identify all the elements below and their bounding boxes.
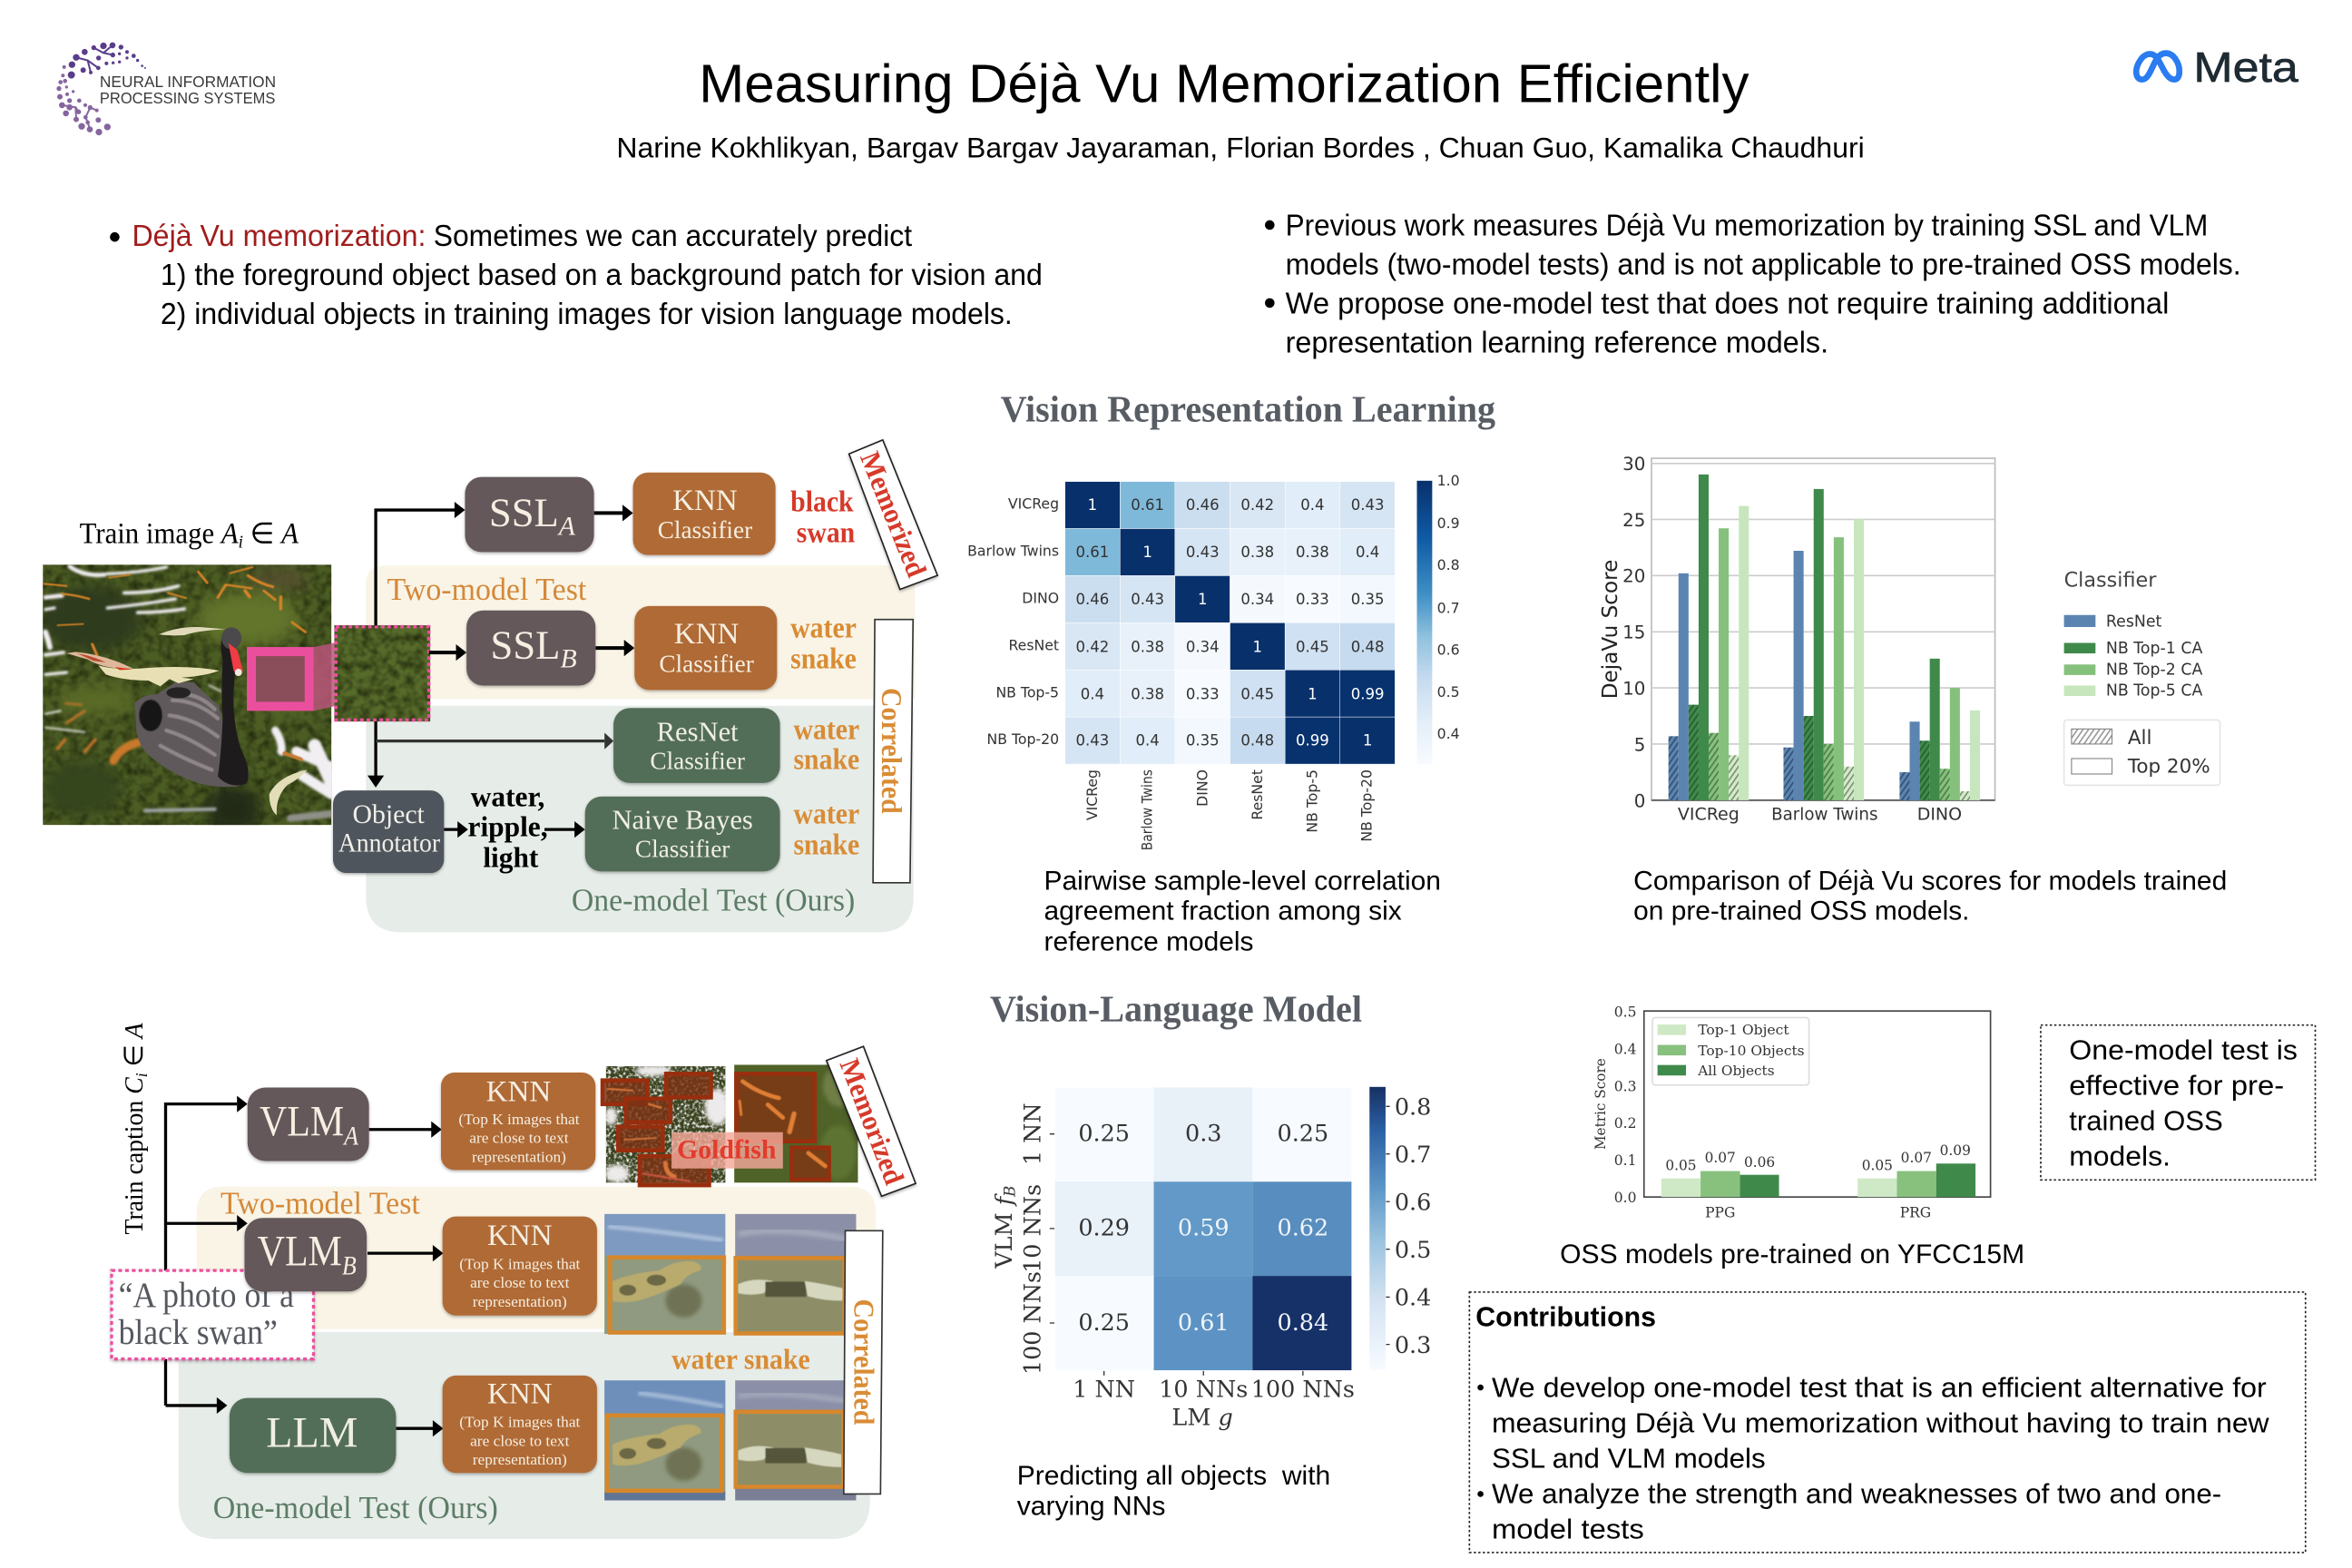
caption: bar chart comparison: Comparison of Déjà Vu scores for models trained (1633, 866, 2227, 896)
prediction: water snake (ResNet): snake (793, 743, 859, 776)
box: Object Annotator (333, 790, 444, 873)
legend: hatch (2064, 720, 2220, 785)
bullet list: SSL and VLM models (1492, 1443, 1766, 1474)
y axis title: B (1001, 1186, 1018, 1198)
image: snake C1 (604, 1380, 725, 1501)
heatmap: pairwise correlation among six reference models (967, 472, 1460, 850)
bar chart: OSS models pre-trained on YFCC15M (1592, 1004, 1991, 1220)
box: KNN classifier A: KNN (672, 485, 738, 517)
box: KNN classifier B (634, 606, 777, 690)
callout: caption example (112, 1270, 313, 1359)
label: train caption: ∈ (120, 1038, 149, 1073)
heatmap values: 0.4 (1300, 496, 1325, 514)
arrows (165, 1096, 443, 1436)
panel: vision memorization diagram (39, 440, 937, 933)
y tick labels: 0.1 (1614, 1152, 1636, 1169)
heatmap values: 0.61 (1178, 1309, 1230, 1337)
bars: VICReg (1669, 475, 1749, 800)
image: goldfish 2 (734, 1064, 859, 1182)
heatmap values: 0.25 (1278, 1120, 1328, 1147)
y tick labels: 0.2 (1614, 1115, 1636, 1132)
x tick labels: 100 NNs (1251, 1376, 1355, 1403)
heatmap values: 0.3 (1185, 1120, 1221, 1147)
heatmap cells (1055, 1087, 1351, 1370)
box: KNN A: (Top K images that (458, 1111, 580, 1128)
images: snake retrieval (604, 1214, 856, 1501)
bar values: 0.07 (1901, 1150, 1932, 1166)
y tick labels: 20 (1622, 565, 1645, 586)
box: KNN B: representation) (473, 1293, 567, 1310)
y tick labels: 5 (1634, 734, 1645, 755)
bars: Barlow Twins (1783, 489, 1864, 800)
label: Correlated (873, 620, 913, 883)
axes and gridlines (1651, 458, 1995, 800)
heatmap row labels: VICReg (1008, 495, 1059, 512)
bar chart: Déjà Vu scores by classifier (1599, 454, 2220, 824)
logo: Neural Information Processing Systems (57, 43, 276, 135)
panel: vision-language diagram (112, 1023, 916, 1539)
y tick labels (1622, 454, 1645, 811)
label: train image: Train image A (80, 516, 240, 549)
legend: classifier (2064, 568, 2202, 701)
box: Naive Bayes classifier (585, 797, 780, 871)
box: KNN B: (Top K images that (459, 1255, 581, 1272)
heatmap values: 0.38 (1296, 544, 1329, 561)
heatmap values: 0.43 (1186, 544, 1220, 561)
heatmap values: 0.99 (1351, 685, 1384, 702)
prediction: water snake (SSL B) (790, 612, 857, 675)
heatmap values: 0.84 (1278, 1309, 1328, 1337)
colorbar: 0.4 (1395, 1285, 1431, 1312)
heatmap colorbar: 0.8 (1437, 556, 1460, 573)
box: KNN A (441, 1073, 595, 1170)
heatmap row labels (967, 495, 1059, 748)
heatmap values: 0.38 (1240, 544, 1274, 561)
box: KNN C (443, 1376, 597, 1473)
heatmap values: 1 (1253, 638, 1262, 655)
heatmap values: 0.99 (1296, 732, 1329, 750)
prediction: water snake (Naive Bayes): snake (793, 828, 859, 860)
y tick labels: 10 (1622, 678, 1645, 699)
label: Memorized: Memorized (854, 447, 933, 582)
heatmap values: 0.29 (1078, 1215, 1130, 1242)
heatmap values (1078, 1120, 1328, 1337)
colorbar (1369, 1087, 1431, 1370)
box: KNN C: are close to text (470, 1433, 570, 1450)
caption: correlation heatmap: reference models (1044, 926, 1253, 956)
y tick labels: 30 (1622, 454, 1645, 475)
box: KNN B (443, 1217, 597, 1316)
heatmap values: 0.42 (1240, 496, 1274, 514)
text block: previous work and proposal (1265, 210, 2241, 359)
x tick labels (1705, 1204, 1931, 1220)
text: annotated objects: water, (471, 781, 544, 813)
caption: predicting all objects (1017, 1461, 1330, 1522)
y axis title: Metric Score (1592, 1058, 1609, 1150)
label: train caption: i (132, 1073, 151, 1077)
colorbar: 0.3 (1395, 1332, 1431, 1359)
y tick labels: 10 NNs (1020, 1184, 1047, 1273)
cropped background patch (334, 625, 430, 721)
text block: previous work and proposal: Previous work measures Déjà Vu memorization by training SSL and VLM (1286, 210, 2208, 243)
legend: classifier: Classifier (2064, 568, 2157, 592)
box: KNN C: representation) (473, 1451, 567, 1468)
heatmap values: 0.43 (1076, 732, 1109, 750)
colorbar: 0.7 (1395, 1142, 1431, 1169)
heatmap values: 0.4 (1356, 544, 1379, 561)
text block: previous work and proposal: models (two-model tests) and is not applicable to pre-trained OSS models. (1286, 249, 2241, 282)
heatmap row labels: NB Top-20 (986, 730, 1059, 748)
legend: hatch: Top 20% (2127, 755, 2210, 778)
callout: one-model test is effective: trained OSS (2069, 1105, 2223, 1136)
bullet list (1477, 1373, 2270, 1545)
heatmap values: 0.59 (1178, 1215, 1230, 1242)
heatmap values: 0.25 (1078, 1309, 1130, 1337)
title: Measuring Déjà Vu Memorization Efficiently (699, 53, 1749, 113)
heatmap colorbar: 1.0 (1437, 472, 1460, 489)
caption: correlation heatmap: Pairwise sample-level correlation (1044, 866, 1441, 896)
heatmap column labels: ResNet (1249, 769, 1266, 820)
label: Memorized: Memorized (834, 1054, 911, 1190)
image: snake B2 (735, 1214, 856, 1335)
text block: definition of Déjà Vu memorization: 2) individual objects in training images for vision language models. (161, 298, 1013, 331)
box: VLM B: VLM (258, 1227, 354, 1275)
y tick labels: 15 (1622, 622, 1645, 642)
box: ResNet classifier (613, 708, 780, 783)
prediction: water snake (ResNet) (793, 712, 859, 776)
box: VLM A: VLM (260, 1097, 356, 1145)
caption: predicting all objects: varying NNs (1017, 1492, 1165, 1522)
box: KNN A: are close to text (469, 1130, 569, 1147)
heatmap: predicting all objects with varying NNs (991, 1087, 1431, 1431)
caption: correlation heatmap: agreement fraction among six (1044, 897, 1402, 926)
one-model test background (179, 1332, 870, 1539)
box: KNN classifier B: Classifier (659, 651, 754, 678)
bar values: 0.07 (1705, 1150, 1736, 1166)
label: train image: ∈ (243, 516, 281, 549)
x tick labels: PPG (1705, 1204, 1735, 1220)
prediction: water snake (ResNet): water (793, 712, 859, 745)
box: SSL A (465, 477, 594, 552)
text block: definition of Déjà Vu memorization: Sometimes we can accurately predict (434, 220, 912, 253)
text block: previous work and proposal: We propose one-model test that does not require training additional (1286, 287, 2169, 320)
two-model test background (197, 1187, 876, 1329)
prediction: black swan: black (790, 486, 854, 519)
y tick labels: 1 NN (1020, 1102, 1047, 1165)
legend: Top-1 Object (1698, 1022, 1789, 1038)
tick marks (1050, 1106, 1390, 1376)
photo: black swan (39, 564, 333, 833)
legend: hatch: All (2128, 727, 2151, 750)
image: snake C2 (735, 1380, 856, 1501)
prediction: black swan (790, 486, 855, 550)
heatmap values: 1 (1088, 496, 1097, 514)
two-model test background (366, 565, 915, 699)
logo: Meta (2136, 44, 2298, 91)
label: Correlated: Correlated (848, 1299, 880, 1426)
y tick labels: 0.5 (1614, 1004, 1636, 1020)
bullet list: measuring Déjà Vu memorization without having to train new (1492, 1408, 2270, 1439)
prediction: water snake (Naive Bayes) (793, 798, 859, 860)
arrows (368, 502, 634, 838)
y tick labels (1020, 1102, 1047, 1375)
label: train image: i (239, 532, 243, 552)
label: One-model Test: One-model Test (Ours) (572, 882, 855, 917)
logo: Neural Information Processing Systems: PROCESSING SYSTEMS (100, 89, 275, 107)
caption: OSS models: OSS models pre-trained on YFCC15M (1560, 1240, 2024, 1269)
swan neck and head (218, 638, 249, 786)
label: Two-model Test: Two-model Test (387, 572, 587, 607)
heatmap values: 0.46 (1076, 591, 1109, 608)
label: One-model Test: One-model Test (Ours) (213, 1490, 498, 1525)
heatmap column labels: NB Top-20 (1358, 769, 1376, 842)
prediction: water snake (SSL B): water (790, 612, 857, 644)
y axis title: DejaVu Score (1599, 560, 1622, 699)
callout: one-model test is effective: effective for pre- (2069, 1071, 2284, 1102)
text block: definition of Déjà Vu memorization: 1) the foreground object based on a background patch for vision and (161, 259, 1043, 292)
bullet list: model tests (1492, 1514, 1644, 1545)
box: SSL B: B (560, 644, 577, 674)
y tick labels: 25 (1622, 510, 1645, 531)
heatmap values: 0.46 (1186, 496, 1220, 514)
x tick labels: DINO (1917, 804, 1962, 824)
heatmap values: 0.61 (1076, 544, 1109, 561)
image: snake B1 (604, 1214, 725, 1334)
legend (1652, 1017, 1809, 1085)
heatmap values: 0.43 (1131, 591, 1164, 608)
prediction: water snake (Naive Bayes): water (793, 798, 859, 830)
colorbar: 0.8 (1395, 1094, 1431, 1122)
y tick labels: 0.0 (1614, 1190, 1636, 1206)
callout: caption example: black swan” (119, 1313, 278, 1352)
heatmap values: 0.62 (1278, 1215, 1328, 1242)
swan body (134, 682, 249, 787)
heatmap colorbar: 0.6 (1437, 642, 1460, 659)
x tick labels: 10 NNs (1159, 1376, 1248, 1403)
heading: Vision Representation Learning: Vision Representation Learning (1001, 388, 1495, 430)
heatmap colorbar (1416, 472, 1460, 764)
colorbar: 0.6 (1395, 1190, 1431, 1217)
bars: PRG (1857, 1163, 1975, 1197)
bars: PPG (1661, 1171, 1779, 1197)
heatmap colorbar: 0.7 (1437, 599, 1460, 616)
heatmap row labels: Barlow Twins (967, 542, 1059, 559)
heatmap values: 0.35 (1351, 591, 1384, 608)
y tick labels (1614, 1004, 1637, 1206)
heatmap values: 0.48 (1240, 732, 1274, 750)
images: goldfish retrieval (603, 1064, 859, 1185)
heatmap values: 0.43 (1351, 496, 1384, 514)
koi (44, 567, 306, 760)
x tick labels: PRG (1900, 1204, 1931, 1220)
bullet list: We develop one-model test that is an efficient alternative for (1492, 1373, 2267, 1404)
y tick labels: 100 NNs (1020, 1271, 1047, 1375)
white koi (98, 665, 220, 686)
colorbar: 0.5 (1395, 1237, 1431, 1264)
y tick labels: 0.3 (1614, 1078, 1636, 1094)
logo: Meta: Meta (2193, 44, 2298, 91)
heatmap colorbar: 0.5 (1437, 683, 1460, 701)
heatmap row labels: DINO (1022, 590, 1059, 607)
heatmap cells (1065, 482, 1395, 764)
text block: definition of Déjà Vu memorization (110, 220, 1043, 331)
label: train caption: Train caption C (120, 1077, 149, 1234)
callout: one-model test is effective: models. (2069, 1141, 2171, 1171)
y tick labels: 0 (1634, 790, 1645, 811)
box: KNN A: representation) (472, 1149, 566, 1166)
heatmap column labels: NB Top-5 (1303, 769, 1320, 833)
legend: Top-10 Objects (1698, 1043, 1805, 1059)
box: SSL B: SSL (491, 622, 560, 668)
prediction: black swan: swan (797, 517, 855, 550)
heatmap values: 0.35 (1186, 732, 1220, 750)
heatmap values: 0.33 (1296, 591, 1329, 608)
heatmap values: 1 (1198, 591, 1208, 608)
bullet list: We analyze the strength and weaknesses of two and one- (1492, 1478, 2221, 1509)
callout: one-model test is effective (2041, 1025, 2316, 1180)
box: ResNet classifier: ResNet (657, 717, 739, 748)
legend: classifier: ResNet (2106, 612, 2162, 631)
callout: one-model test is effective: One-model test is (2069, 1035, 2298, 1066)
caption: correlation heatmap (1044, 866, 1441, 956)
caption: bar chart comparison: on pre-trained OSS models. (1633, 897, 1969, 926)
bar values: 0.06 (1744, 1154, 1775, 1171)
heatmap values: 0.48 (1351, 638, 1384, 655)
box: KNN A: KNN (486, 1075, 551, 1108)
x tick labels: 1 NN (1073, 1376, 1135, 1403)
heatmap values: 0.33 (1186, 685, 1220, 702)
heatmap values: 0.34 (1240, 591, 1274, 608)
heatmap values: 0.34 (1186, 638, 1220, 655)
label: Correlated (844, 1230, 883, 1494)
authors: Narine Kokhlikyan, Bargav Bargav Jayaraman, Florian Bordes , Chuan Guo, Kamalika Chaudhuri (616, 132, 1865, 164)
text block: contributions (1469, 1292, 2306, 1553)
heatmap row labels: NB Top-5 (995, 684, 1059, 701)
callout: caption example: “A photo of a (119, 1276, 294, 1315)
heading: Vision-Language Model: Vision-Language Model (990, 988, 1362, 1030)
x tick labels (1073, 1376, 1355, 1403)
box: Object Annotator: Object (352, 799, 426, 829)
one-model test background (366, 706, 914, 933)
legend: classifier: NB Top-1 CA (2106, 640, 2202, 658)
text block: previous work and proposal: representation learning reference models. (1286, 326, 1828, 359)
text: annotated objects: ripple, (468, 810, 548, 842)
axes (1644, 1011, 1991, 1197)
box: Object Annotator: Annotator (338, 828, 440, 858)
label: Goldfish: Goldfish (677, 1135, 777, 1165)
box: KNN B: KNN (487, 1220, 553, 1252)
label: water snake: water snake (671, 1343, 810, 1375)
box: KNN C: KNN (487, 1378, 553, 1411)
heading: contributions: Contributions (1475, 1301, 1656, 1332)
box: KNN C: (Top K images that (459, 1414, 581, 1431)
box: ResNet classifier: Classifier (650, 748, 745, 775)
box: KNN classifier A: Classifier (658, 516, 752, 544)
label: Two-model Test: Two-model Test (220, 1185, 420, 1220)
heatmap values: 0.4 (1135, 732, 1160, 750)
heatmap colorbar: 0.4 (1437, 725, 1460, 742)
legend: classifier: NB Top-2 CA (2106, 662, 2202, 680)
box: Naive Bayes classifier: Naive Bayes (612, 804, 753, 835)
heatmap values: 0.45 (1296, 638, 1329, 655)
heatmap values: 1 (1142, 544, 1152, 561)
bar values (1665, 1142, 1971, 1173)
heatmap column labels: VICReg (1083, 769, 1101, 820)
heatmap column labels: Barlow Twins (1139, 769, 1156, 850)
bars: DINO (1899, 659, 1980, 800)
legend: All Objects (1697, 1063, 1775, 1079)
heatmap row labels: ResNet (1008, 637, 1059, 654)
box: KNN classifier B: KNN (674, 618, 740, 651)
heatmap values (1076, 496, 1384, 750)
heatmap values: 0.42 (1076, 638, 1109, 655)
heatmap values: 0.45 (1240, 685, 1274, 702)
heatmap colorbar: 0.9 (1437, 514, 1460, 532)
bar values: 0.05 (1665, 1157, 1697, 1173)
box: VLM A (248, 1087, 369, 1161)
heatmap values: 1 (1363, 732, 1372, 750)
x tick labels: Barlow Twins (1771, 804, 1877, 824)
caption: predicting all objects: Predicting all objects with (1017, 1461, 1330, 1491)
heatmap values: 0.25 (1078, 1120, 1130, 1147)
heatmap values: 1 (1308, 685, 1318, 702)
box: Naive Bayes classifier: Classifier (635, 836, 730, 863)
box: SSL A: A (557, 511, 576, 541)
x axis title: LM g (1171, 1404, 1233, 1431)
box: KNN B: are close to text (470, 1274, 570, 1291)
label: train caption: A (120, 1023, 149, 1040)
legend: classifier: NB Top-5 CA (2106, 682, 2202, 701)
heatmap values: 0.61 (1131, 496, 1164, 514)
heatmap column labels (1083, 769, 1376, 850)
logo: Neural Information Processing Systems: NEURAL INFORMATION (100, 73, 276, 91)
box: VLM B: B (342, 1250, 357, 1280)
prediction: water snake (SSL B): snake (790, 642, 857, 675)
y tick labels: 0.4 (1614, 1041, 1637, 1057)
bar values: 0.09 (1940, 1142, 1971, 1159)
box: KNN classifier A (633, 473, 776, 555)
box: LLM: LLM (266, 1409, 358, 1457)
box: VLM A: A (342, 1121, 359, 1151)
highlighted patch on photo (251, 642, 334, 710)
heatmap values: 0.38 (1131, 685, 1164, 702)
label: train image: A (279, 516, 299, 549)
x tick labels: VICReg (1678, 804, 1740, 824)
image: goldfish 1 (603, 1065, 729, 1185)
heatmap column labels: DINO (1194, 769, 1211, 807)
text: annotated objects (468, 781, 548, 873)
text block: definition of Déjà Vu memorization: Déjà Vu memorization: (132, 220, 426, 253)
box: SSL B (466, 611, 595, 685)
x tick labels (1678, 804, 1962, 824)
text: annotated objects: light (483, 841, 539, 873)
box: LLM (230, 1398, 396, 1473)
heatmap values: 0.38 (1131, 638, 1164, 655)
y axis title: VLM f (991, 1197, 1018, 1269)
caption: bar chart comparison (1633, 866, 2227, 926)
label: Correlated: Correlated (876, 688, 907, 814)
heatmap values: 0.4 (1081, 685, 1104, 702)
box: SSL A: SSL (489, 489, 559, 534)
box: VLM B (244, 1218, 367, 1291)
bar values: 0.05 (1862, 1157, 1893, 1173)
